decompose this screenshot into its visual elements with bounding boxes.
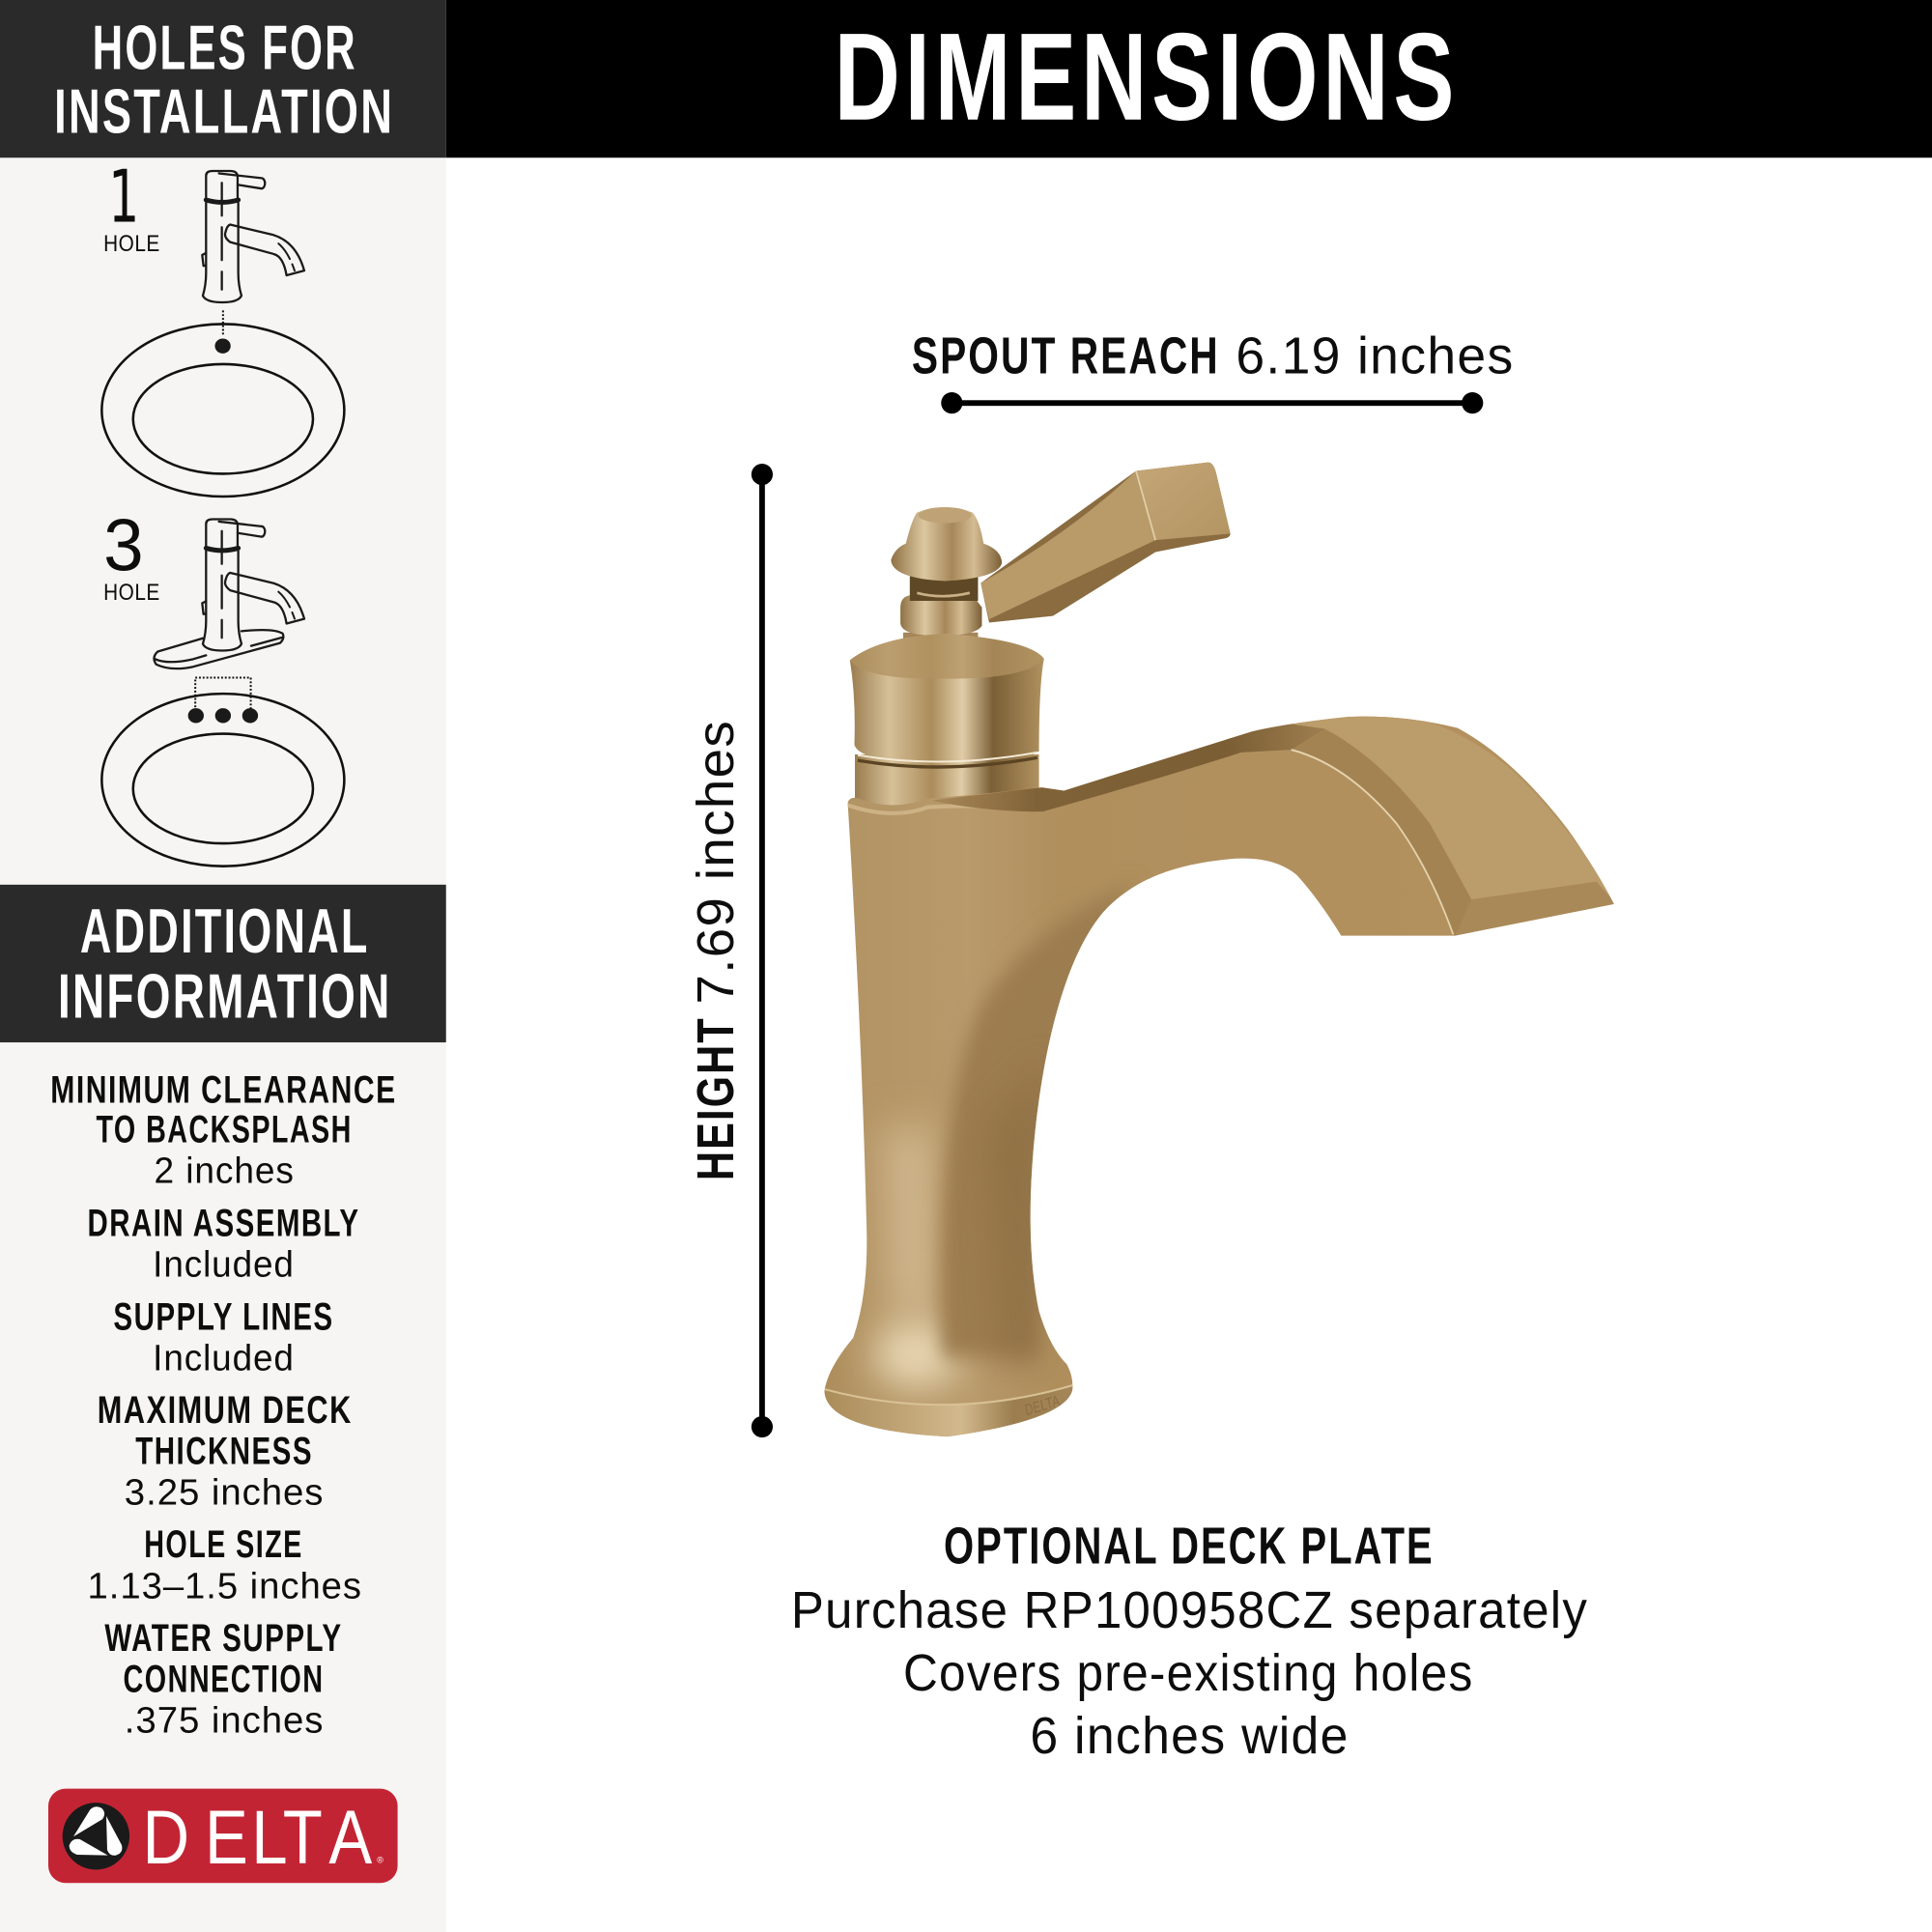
text block: hole size [88,1523,362,1606]
logo: delta: DELTA [142,1795,372,1880]
arrow: height line [752,464,773,1437]
text block: minimum clearance: 2 inches [154,1150,295,1191]
text block: optional deck plate: Purchase RP100958CZ separately [791,1582,1588,1639]
arrow: spout reach line [941,392,1483,413]
knob [891,507,1002,652]
label: 1 hole: HOLE [103,231,160,257]
collar under cap [855,754,1039,810]
logo: delta [48,1789,398,1883]
stem highlight [881,1127,942,1312]
image: gold faucet illustration [825,462,1614,1437]
text block: drain assembly [88,1202,359,1285]
text block: water supply connection: WATER SUPPLY [104,1617,343,1660]
heading: holes for installation: INSTALLATION [54,76,394,147]
heading: holes for installation [0,0,446,157]
heading: additional information: ADDITIONAL [80,895,370,966]
text block: water supply connection [104,1617,343,1741]
text block: optional deck plate: Covers pre-existing holes [903,1645,1474,1702]
label: 3 hole [103,505,160,606]
label: 3 hole: 3 [103,505,146,587]
text block: water supply connection: .375 inches [125,1699,324,1741]
label: 1 hole: 1 [108,155,140,240]
dimension: height label: 7.69 inches [688,720,745,1005]
heading: additional information [0,885,446,1042]
handle lever [980,463,1231,622]
text block: minimum clearance: TO BACKSPLASH [96,1108,353,1151]
spout front lip [1455,882,1618,937]
dimension: spout reach label: 6.19 inches [1236,327,1515,384]
header: dimensions title bar: DIMENSIONS [835,8,1459,147]
dimension: spout reach label [912,327,1515,384]
shoulder edge [848,806,1041,813]
spout top face [1286,716,1618,906]
text block: minimum clearance [50,1069,397,1191]
text block: hole size: 1.13–1.5 inches [88,1565,362,1606]
text block: maximum deck thickness: THICKNESS [135,1430,313,1472]
icon: three hole faucet with deck plate [155,519,304,668]
panel: sidebar background [0,0,446,1932]
text block: optional deck plate: 6 inches wide [1030,1708,1350,1765]
arm shadow [931,724,1355,811]
text block: maximum deck thickness [98,1389,353,1513]
text block: supply lines: SUPPLY LINES [113,1295,334,1338]
text block: drain assembly: DRAIN ASSEMBLY [88,1202,359,1244]
text block: minimum clearance: MINIMUM CLEARANCE [50,1069,397,1112]
text block: maximum deck thickness: MAXIMUM DECK [98,1389,353,1432]
dimension: height label [688,720,745,1180]
icon: single hole sink diagram [101,310,344,497]
dimension: height label: HEIGHT [688,1016,745,1180]
dimension: spout reach label: SPOUT REACH [912,327,1220,384]
spout bevel band [1292,728,1471,937]
text block: drain assembly: Included [153,1243,295,1285]
text block: supply lines: Included [153,1337,295,1378]
heading: additional information: INFORMATION [58,961,392,1032]
foot rim [825,1386,1072,1437]
text block: water supply connection: CONNECTION [124,1658,324,1700]
text block: supply lines [113,1295,334,1378]
icon: single hole faucet line drawing [202,171,304,302]
logo: delta: ® [377,1856,384,1865]
text block: optional deck plate [791,1519,1588,1765]
faucet body and spout [825,717,1614,1437]
base engraving: DELTA [1024,1392,1062,1420]
stem and arch shadow [941,883,1136,1357]
header: dimensions title bar [446,0,1932,157]
icon: three hole sink diagram [101,678,344,867]
foot highlight [872,1321,961,1387]
label: 3 hole: HOLE [103,580,160,606]
text block: maximum deck thickness: 3.25 inches [125,1471,324,1513]
text block: optional deck plate: OPTIONAL DECK PLATE [944,1519,1435,1576]
cap cylinder [850,634,1044,767]
text block: hole size: HOLE SIZE [144,1523,303,1566]
heading: holes for installation: HOLES FOR [93,12,357,82]
